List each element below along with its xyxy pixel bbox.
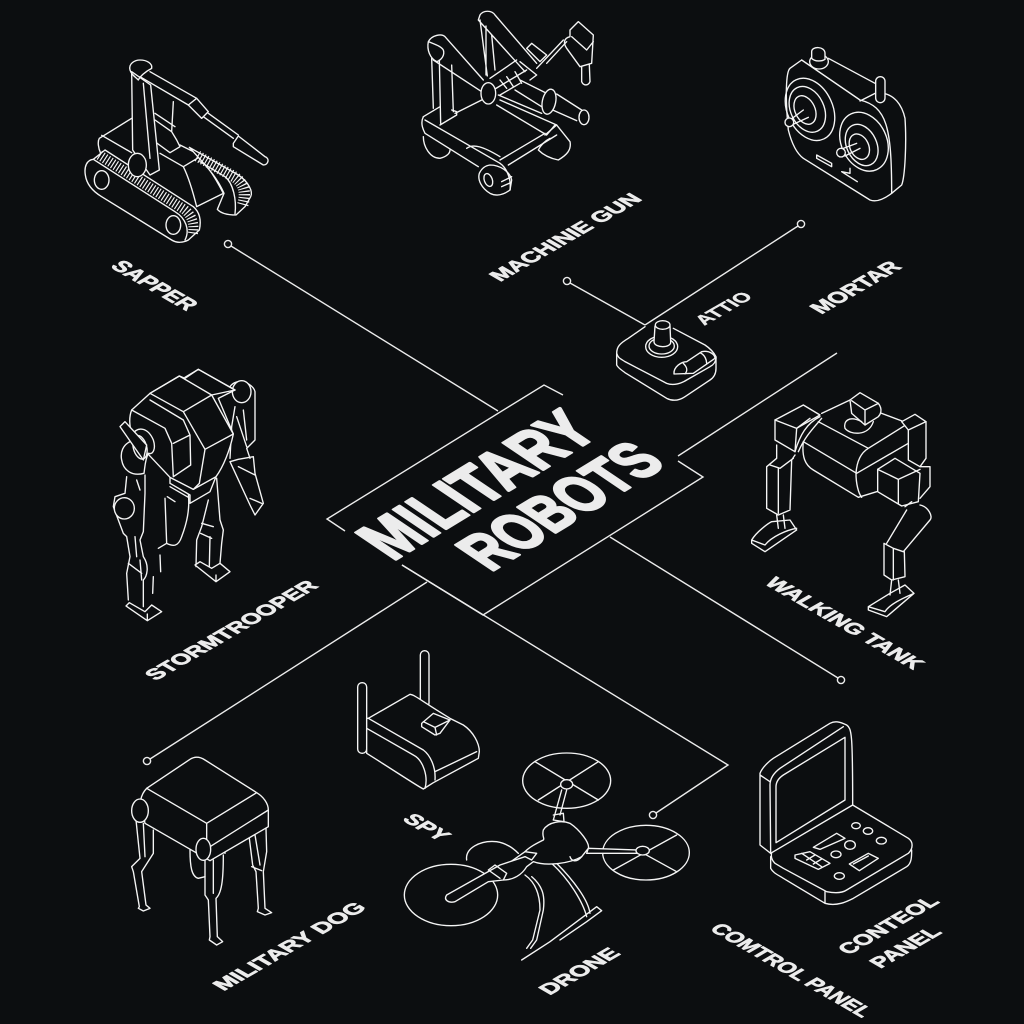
label: drone: DRONE	[534, 945, 626, 998]
icon: control panel	[760, 722, 912, 904]
connector lines	[143, 220, 845, 819]
label: walking tank: WALKING TANK	[759, 574, 929, 673]
label: mortar: MORTAR	[804, 257, 907, 317]
title: robots: ROBOTS	[441, 431, 679, 580]
icon: military dog	[132, 757, 272, 945]
label: control panel, right line one: CONTEOL	[833, 893, 945, 958]
icon: sapper tracked robot	[85, 60, 268, 242]
label: control panel, left: COMTROL PANEL	[705, 920, 878, 1021]
icon: drone	[404, 753, 689, 960]
label: spy: SPY	[397, 811, 455, 844]
label: sapper: SAPPER	[105, 257, 204, 314]
title: military: MILITARY	[340, 399, 613, 570]
icon: machine gun robot	[422, 11, 593, 195]
label: machine gun: MACHINIE GUN	[484, 190, 647, 285]
icon: joystick	[617, 321, 716, 400]
label: attio: ATTIO	[691, 289, 758, 328]
icon: spy robot	[358, 651, 479, 789]
icon: walking tank	[752, 393, 931, 617]
label: military dog: MILITARY DOG	[208, 899, 372, 994]
icon: stormtrooper robot	[113, 369, 263, 621]
title panel	[327, 385, 703, 615]
label: control panel, right line two: PANEL	[865, 924, 947, 971]
icon: remote controller	[776, 48, 906, 201]
label: stormtrooper: STORMTROOPER	[140, 577, 324, 684]
